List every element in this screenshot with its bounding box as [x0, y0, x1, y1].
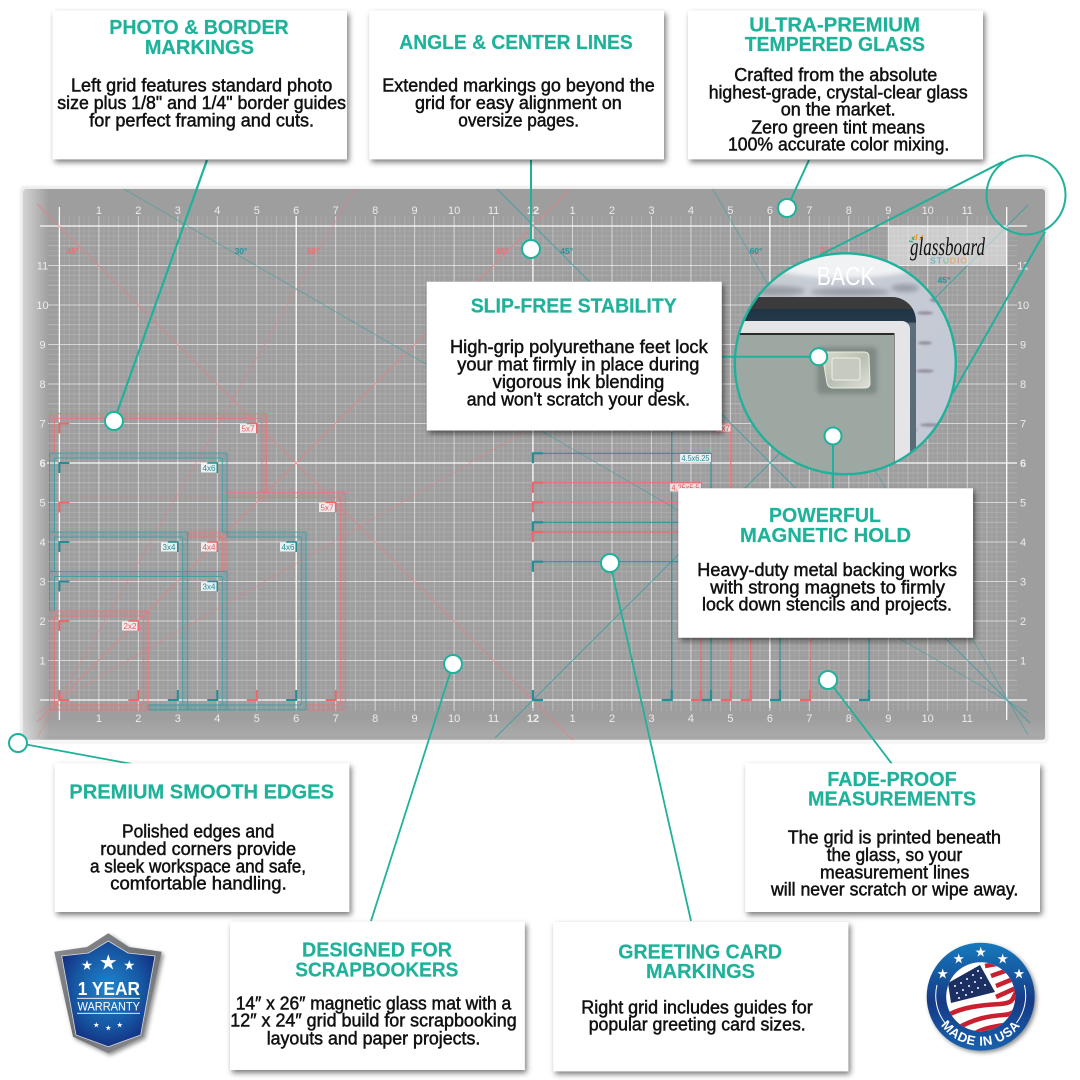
body text: comfortable handling. [110, 874, 287, 894]
ruler numbers: left: 6 [39, 458, 46, 470]
ruler numbers: top [96, 205, 973, 217]
ruler numbers: left: 10 [36, 300, 49, 312]
icon: 1 year warranty shield: WARRANTY [78, 1000, 140, 1014]
left grid size labels: 3x4 [163, 543, 176, 552]
ruler numbers: left: 8 [39, 379, 46, 391]
leader dots [9, 199, 842, 752]
heading [109, 16, 289, 59]
glass mat board [20, 186, 1048, 743]
body text: Left grid features standard photo [71, 76, 332, 96]
body text [450, 337, 709, 410]
ruler numbers: left: 3 [39, 576, 46, 588]
ruler numbers: bottom: 6 [293, 713, 299, 725]
ruler numbers: bottom: 11 [488, 713, 499, 725]
ruler numbers: bottom: 12 [527, 713, 539, 725]
ruler numbers: top: 10 [448, 205, 460, 217]
angle labels: 30° [820, 245, 833, 255]
body text: highest-grade, crystal-clear glass [709, 82, 968, 102]
panel: ultra-premium tempered glass [688, 11, 983, 159]
ruler numbers: top: 4 [688, 205, 694, 217]
ruler numbers: bottom [96, 713, 973, 725]
body text [57, 76, 346, 130]
greeting card size labels: 4.25x5.5 [672, 484, 700, 492]
body text: and won't scratch your desk. [467, 390, 690, 410]
ruler numbers: left: 9 [39, 340, 46, 352]
heading: ULTRA-PREMIUM [749, 13, 920, 36]
ruler numbers: top: 8 [846, 205, 852, 217]
body text: Crafted from the absolute [734, 65, 937, 85]
ruler numbers: left [36, 260, 49, 668]
red 2x2 [50, 611, 148, 710]
angle lines [37, 189, 1030, 740]
heading: TEMPERED GLASS [745, 33, 925, 56]
heading: SCRAPBOOKERS [295, 958, 458, 981]
red 4x4 [188, 532, 227, 572]
red 5x7 portrait [50, 414, 267, 493]
ruler numbers: left: 11 [37, 260, 48, 272]
panel: greeting card markings [553, 922, 848, 1071]
ruler numbers: right: 11 [1017, 260, 1029, 272]
ruler numbers: left: 1 [39, 656, 46, 668]
left grid size labels: 4x6 [203, 464, 216, 473]
body text: rounded corners provide [100, 839, 296, 859]
panel: fade-proof measurements [745, 763, 1040, 912]
logo: glassboard studio [888, 226, 1007, 266]
teal 3x4 portrait [50, 532, 188, 710]
left grid size labels [122, 424, 336, 631]
ruler numbers: bottom: 6 [767, 713, 773, 725]
body text: for perfect framing and cuts. [89, 110, 314, 130]
red dashed hidden guides [54, 498, 262, 705]
ruler numbers: bottom: 9 [412, 713, 418, 725]
ruler numbers: top: 1 [96, 205, 102, 217]
angle labels: 45° [66, 246, 80, 256]
heading [808, 768, 976, 811]
ruler numbers: top: 4 [214, 205, 220, 217]
body text: 14″ x 26″ magnetic glass mat with a [236, 993, 512, 1013]
panel: designed for scrapbookers [230, 922, 525, 1070]
ruler numbers: bottom: 9 [885, 713, 891, 725]
ruler numbers: top: 7 [806, 205, 812, 217]
heading: POWERFUL [769, 504, 881, 527]
photo size and border guides (left grid) [50, 414, 346, 710]
ruler numbers: top: 11 [961, 205, 973, 217]
angle labels: 60° [750, 246, 763, 256]
ruler numbers: bottom: 7 [806, 713, 812, 725]
leader lines [18, 160, 892, 921]
ruler numbers: right: 7 [1020, 418, 1026, 430]
greeting card guides (right grid) [533, 424, 869, 700]
ruler numbers: right: 3 [1020, 576, 1026, 588]
angle labels: 60° [307, 246, 320, 256]
body text [581, 997, 813, 1035]
heading: MAGNETIC HOLD [740, 524, 911, 547]
ruler numbers: top: 3 [648, 205, 655, 217]
ruler numbers: bottom: 1 [96, 713, 102, 725]
icon: polyurethane foot [823, 352, 870, 388]
icon: 1 year warranty shield [54, 933, 162, 1053]
heading: DESIGNED FOR [302, 938, 452, 961]
ruler numbers: left: 5 [39, 498, 46, 510]
logo: glassboard studio: glassboard [910, 234, 985, 261]
heading: MARKINGS [646, 960, 755, 983]
heading [740, 504, 911, 547]
body text: lock down stencils and projects. [702, 595, 952, 615]
ruler numbers: top: 6 [767, 205, 773, 217]
ruler numbers: top: 9 [885, 205, 891, 217]
body text: the glass, so your [827, 845, 962, 865]
left grid size labels: 3x4 [203, 582, 216, 592]
angle labels: 45° [496, 246, 509, 256]
ruler numbers: bottom: 4 [688, 713, 694, 725]
body text: a sleek workspace and safe, [90, 856, 306, 876]
body text: with strong magnets to firmly [709, 577, 945, 597]
angle labels: 45° [938, 275, 951, 285]
body text [709, 65, 968, 155]
heading: GREETING CARD [618, 940, 782, 963]
ruler numbers: right: 10 [1017, 300, 1029, 312]
ruler numbers: bottom: 5 [254, 713, 260, 725]
ruler numbers: bottom: 10 [448, 713, 460, 725]
body text: on the market. [781, 100, 896, 120]
heading: FADE-PROOF [827, 768, 957, 791]
ruler numbers: left: 4 [39, 537, 46, 549]
body text [697, 560, 957, 615]
ruler numbers: right [1017, 260, 1029, 668]
left grid size labels: 4x4 [203, 543, 216, 552]
body text [382, 76, 655, 130]
ruler numbers: top: 5 [727, 205, 733, 217]
ruler numbers: left: 7 [39, 418, 46, 430]
left grid corner marks [59, 424, 336, 700]
body text: Zero green tint means [751, 117, 925, 137]
body text: The grid is printed beneath [788, 827, 1001, 847]
body text [90, 821, 306, 894]
ruler numbers: top: 9 [412, 205, 418, 217]
logo: glassboard studio: STUDIO [930, 256, 967, 266]
body text: High-grip polyurethane feet lock [450, 337, 709, 357]
greeting card size labels [670, 424, 731, 492]
ruler numbers: bottom: 4 [214, 713, 220, 725]
ruler numbers: bottom: 3 [648, 713, 655, 725]
teal 4x6 landscape [148, 532, 306, 710]
body text: popular greeting card sizes. [589, 1015, 806, 1035]
left grid size labels: 5x7 [242, 424, 255, 434]
body text: Right grid includes guides for [581, 997, 813, 1017]
ruler numbers: bottom: 1 [569, 713, 576, 725]
heading [618, 940, 782, 983]
body text: 12″ x 24″ grid build for scrapbooking [230, 1011, 517, 1031]
ruler numbers: right: 5 [1020, 498, 1026, 510]
ruler numbers: bottom: 7 [333, 713, 339, 725]
icon: 1 year warranty shield: 1 YEAR [78, 978, 140, 999]
ruler numbers: top: 6 [293, 205, 299, 217]
body text: 100% accurate color mixing. [728, 135, 949, 155]
ruler numbers: left: 2 [39, 616, 46, 628]
greeting card size labels: 5x7 [717, 424, 730, 433]
panel: slip-free stability [427, 282, 722, 430]
body text: your mat firmly in place during [457, 355, 699, 375]
body text: measurement lines [820, 862, 969, 882]
ruler numbers: bottom: 3 [175, 713, 181, 725]
panel: premium smooth edges [55, 763, 349, 912]
heading [295, 938, 458, 981]
ruler numbers: top: 1 [569, 205, 576, 217]
heading: PHOTO & BORDER [109, 16, 289, 39]
body text: vigorous ink blending [493, 372, 664, 392]
ruler numbers: right: 4 [1020, 537, 1026, 549]
body text [230, 993, 517, 1048]
teal 3x4 landscape [50, 572, 227, 710]
ruler numbers: top: 10 [922, 205, 934, 217]
angle labels: 45° [560, 246, 574, 256]
ruler numbers: top: 2 [135, 205, 141, 217]
icon: made in USA badge: MADE IN USA [941, 1020, 1020, 1046]
body text: grid for easy alignment on [415, 93, 622, 113]
ruler numbers: top: 2 [609, 205, 615, 217]
left grid size labels: 2x2 [124, 622, 137, 631]
ruler numbers: right: 1 [1020, 656, 1026, 668]
body text: oversize pages. [458, 110, 579, 130]
zoom label: BACK: BACK [817, 261, 875, 291]
ruler numbers: top: 5 [254, 205, 260, 217]
icon: made in USA badge [926, 942, 1040, 1056]
ruler numbers: bottom: 2 [609, 713, 615, 725]
ruler numbers: bottom: 2 [135, 713, 141, 725]
ruler numbers: top: 12 [527, 205, 539, 217]
ruler numbers: bottom: 11 [961, 713, 973, 725]
panel: angle and center lines [369, 11, 664, 159]
ruler numbers: top: 8 [372, 205, 378, 217]
left grid size labels: 5x7 [321, 504, 334, 512]
heading: ANGLE & CENTER LINES [399, 31, 633, 54]
body text: Polished edges and [122, 821, 274, 841]
angle labels: 30° [235, 246, 248, 256]
greeting card size labels: 4.5x6.25 [682, 454, 710, 463]
ruler numbers: right: 6 [1020, 458, 1026, 470]
ruler numbers: right: 2 [1020, 616, 1026, 628]
body text: Heavy-duty metal backing works [697, 560, 957, 580]
left grid size labels: 4x6 [282, 543, 295, 552]
heading: MEASUREMENTS [808, 788, 976, 811]
ruler numbers: top: 7 [333, 205, 339, 217]
ruler numbers: bottom: 8 [846, 713, 852, 725]
ruler numbers: top: 3 [175, 205, 181, 217]
ruler numbers: bottom: 10 [922, 713, 934, 725]
teal 4x6 portrait [50, 453, 227, 532]
ruler numbers: bottom: 5 [727, 713, 733, 725]
heading [745, 13, 925, 56]
panel: powerful magnetic hold [678, 488, 973, 638]
ruler numbers: bottom: 8 [372, 713, 378, 725]
body text [770, 827, 1018, 900]
ruler numbers: right: 8 [1020, 379, 1026, 391]
body text: Extended markings go beyond the [382, 76, 655, 96]
magnifier callout: enlarged corner circle [734, 154, 1066, 476]
body text: size plus 1/8" and 1/4" border guides [57, 93, 346, 113]
heading: MARKINGS [145, 36, 254, 59]
angle labels [66, 245, 951, 285]
body text: will never scratch or wipe away. [770, 880, 1018, 900]
red 5x7 landscape [227, 493, 346, 710]
ruler numbers: right: 9 [1020, 340, 1026, 352]
heading: SLIP-FREE STABILITY [471, 295, 677, 318]
ruler numbers: top: 11 [488, 205, 499, 217]
heading: PREMIUM SMOOTH EDGES [69, 781, 334, 804]
body text: layouts and paper projects. [267, 1028, 480, 1048]
grid lines [40, 207, 1027, 720]
panel: photo and border markings [53, 11, 347, 159]
